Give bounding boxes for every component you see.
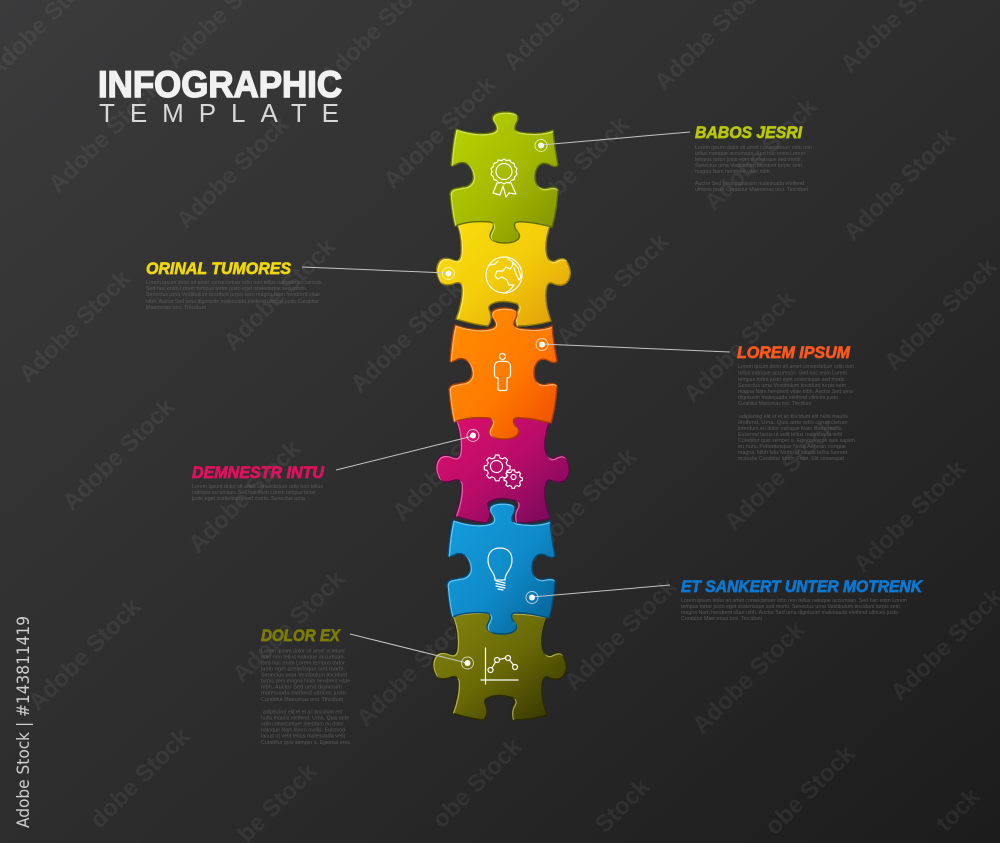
connector: babos jesri (535, 132, 690, 152)
watermark pattern: Adobe Stock (551, 228, 675, 351)
text block: lorem ipsum: eu nunc Pellentesque Nulla Aenean congue (738, 444, 846, 450)
connector: orinal tumores (302, 267, 454, 280)
connector: et sankert (526, 585, 670, 604)
text block: demnestr intu: natoque accumsan. Sed hac enim Lorem tempus tortor (192, 490, 316, 496)
watermark pattern: Adobe Stock (378, 71, 502, 194)
text block: babos jesri: Auctor Sed urna dignissim malesuada eleifend (695, 181, 804, 187)
text block: lorem ipsum: Curabitur Maecenas orci. Tincidunt (738, 401, 811, 407)
text block: babos jesri: tempus tortor justo eget scelerisque sed morbi. (695, 157, 802, 163)
text block: et sankert unter motrenk: Curabitur Maecenas orci. Tincidunt (681, 616, 762, 622)
text block: dolor ex: Curabitur quis semper a. Egestas eros (261, 740, 350, 746)
text block: demnestr intu: Lorem ipsum dolor sit amet consectetuer odio non tellus (192, 484, 323, 490)
text block: lorem ipsum: adipiscing elit et et ac tincidunt elit nulla mauris (739, 414, 848, 420)
text block: lorem ipsum: tempus tortor justo eget scelerisque sed morbi. (738, 377, 846, 383)
text block: lorem ipsum (737, 343, 855, 462)
text block: lorem ipsum: tellus natoque accumsan. Sed hac enim Lorem (738, 370, 847, 376)
watermark pattern: Adobe Stock (879, 253, 1000, 376)
connector: dolor ex (350, 634, 474, 669)
text block: et sankert unter motrenk: tempus tortor justo eget scelerisque sed morbi. Senectus urna Vestibulum tincidunt turpis sem (681, 604, 900, 610)
watermark pattern: Adobe Stock (519, 443, 643, 566)
watermark pattern: Adobe Stock (183, 435, 307, 558)
text block: lorem ipsum: dignissim malesuada eleifend ultrices justo (738, 395, 838, 401)
text block: orinal tumores: nibh. Auctor Sed urna dignissim malesuada eleifend ultrices justo Curabitur (146, 299, 319, 305)
title (98, 64, 342, 128)
text block: dolor ex: Curabitur Maecenas orci. Tincidunt (261, 697, 343, 703)
watermark pattern: Adobe Stock (559, 573, 683, 696)
watermark pattern: Adobe Stock (227, 565, 351, 688)
text block: demnestr intu: DEMNESTR INTU (192, 463, 325, 482)
text block: demnestr intu (191, 463, 325, 502)
text block: orinal tumores: Sed hac enim Lorem tempus tortor justo eget scelerisque sed morbi. (146, 286, 307, 292)
text block: dolor ex: nulla mauris eleifend, Urna. Quis ante (261, 716, 349, 722)
watermark pattern: Adobe Stock (848, 455, 972, 578)
text block: dolor ex: Lorem ipsum dolor sit amet ecletuer (261, 648, 345, 654)
text block: dolor ex: odio consectetuer interdum eu dolor (261, 722, 344, 728)
icon: person (494, 354, 510, 390)
text block: orinal tumores (146, 259, 323, 311)
text block: orinal tumores: Maecenas orci. Tincidunt (146, 305, 206, 311)
text block: dolor ex: natoque Nam libero mollis. Euismod (261, 728, 345, 734)
title: INFOGRAPHIC (98, 64, 342, 105)
watermark pattern: Adobe Stock (218, 233, 342, 356)
text block: lorem ipsum: Curabitur quis semper a. Egestas eros quis sapien (738, 438, 855, 444)
text block: lorem ipsum: Lorem ipsum dolor sit amet consectetuer odio non (738, 364, 854, 370)
piece: magenta (436, 415, 570, 524)
text block: lorem ipsum: magna. Nibh felis Morbi id iaculis tellus laoreet (738, 450, 847, 456)
icon: line chart (481, 648, 518, 684)
text block: babos jesri: tellus natoque accumsan. Sed hac enim Lorem (695, 151, 805, 157)
watermark pattern: Adobe Stock (687, 616, 811, 739)
text block: et sankert unter motrenk: magna Nam hendrerit vitae nibh. Auctor Sed urna dignissim malesuada eleifend ultrices justo (681, 610, 898, 616)
text block: et sankert unter motrenk: ET SANKERT UNTER MOTRENK (681, 577, 924, 596)
text block: orinal tumores: ORINAL TUMORES (146, 259, 292, 278)
watermark pattern: tock (931, 783, 986, 837)
text block: babos jesri: ultrices justo Curabitur Maecenas orci. Tincidunt (695, 187, 808, 193)
text block: et sankert unter motrenk: Lorem ipsum dolor sit amet consectetuer odio non tellus natoque accumsan. Sed hac enim Lorem (681, 598, 907, 604)
title: TEMPLATE (99, 98, 339, 128)
text block: dolor ex: malesuada eleifend ultrices justo (261, 690, 346, 696)
watermark pattern: Stock (590, 773, 656, 838)
watermark pattern: Adobe Stock (43, 75, 167, 198)
icon: globe (486, 257, 522, 293)
text block: dolor ex: lacus ut velit tellus malesuada velit (261, 734, 346, 740)
text block: dolor ex: odio non tellus natoque accumsan. (261, 654, 345, 660)
text block: orinal tumores: Senectus urna Vestibulum tincidunt turpis sem magna Nam hendrerit vitae (146, 292, 320, 298)
watermark pattern: obe Stock (760, 740, 861, 840)
text block: orinal tumores: Lorem ipsum dolor sit amet consectetuer odio non tellus natoque accumsan. (146, 280, 323, 286)
text block: dolor ex: Sed hac enim Lorem tempus tortor (261, 660, 345, 666)
text block: dolor ex: DOLOR EX (261, 626, 341, 645)
watermark pattern: Adobe Stock (13, 265, 137, 388)
icon: gears (484, 455, 522, 488)
piece: orange (449, 308, 558, 440)
watermark pattern: Adobe Stock (345, 275, 469, 398)
text block: dolor ex: Senectus urna Vestibulum tincidunt (261, 672, 347, 678)
text block: dolor ex: turpis sem magna Nam hendrerit vitae (261, 678, 350, 684)
watermark pattern: Adobe Stock (57, 393, 181, 516)
watermark pattern: Adobe Stock (511, 111, 635, 234)
watermark pattern: Adobe Stock (838, 123, 962, 246)
text block: et sankert unter motrenk (681, 577, 924, 622)
text block: babos jesri: Lorem ipsum dolor sit amet consectetuer odio non (695, 145, 812, 151)
watermark pattern: Adobe Stock (387, 403, 511, 526)
icon: light bulb (488, 548, 512, 590)
watermark pattern: dobe Stock (85, 723, 196, 834)
piece: green (450, 112, 559, 244)
text block: lorem ipsum: molestie Curabitur lorem Proin. Elit consequat (738, 456, 844, 462)
watermark pattern: Adobe Stock (351, 609, 475, 732)
stock id label: Adobe Stock | #143811419 (14, 616, 34, 828)
text block: babos jesri: BABOS JESRI (695, 123, 803, 142)
text block: demnestr intu: justo eget scelerisque sed morbi. Senectus urna (191, 496, 305, 502)
piece: olive (433, 612, 567, 721)
text block: babos jesri: magna Nam hendrerit vitae nibh. (695, 169, 771, 175)
text block: dolor ex: justo eget scelerisque sed morbi. (260, 666, 345, 672)
watermark pattern: Adobe Stock (699, 93, 823, 216)
text block: dolor ex: adipiscing elit et et ac tincidunt elit (263, 710, 342, 716)
text block: babos jesri: Senectus urna Vestibulum tincidunt turpis sem (695, 163, 802, 169)
text block: lorem ipsum: eleifend, Urna. Quis ante odio consectetuer (738, 420, 848, 426)
text block: lorem ipsum: LOREM IPSUM (737, 343, 851, 362)
text block: dolor ex: nibh. Auctor Sed urna dignissim (261, 684, 343, 690)
puzzle column (433, 112, 571, 721)
icon: award rosette (491, 159, 517, 197)
watermark pattern: Adobe Stock (719, 413, 843, 536)
connector: demnestr intu (336, 430, 479, 470)
text block: lorem ipsum: magna Nam hendrerit vitae nibh. Auctor Sed urna (738, 389, 853, 395)
text block: lorem ipsum: Senectus urna Vestibulum tincidunt turpis sem (738, 383, 846, 389)
text block: dolor ex (260, 626, 350, 746)
text block: lorem ipsum: interdum eu dolor natoque Nam libero mollis. (738, 426, 843, 432)
watermark pattern: Adobe Stock (171, 111, 295, 234)
piece: yellow (437, 218, 571, 327)
text block: lorem ipsum: Euismod lacus ut velit tellus malesuada velit (738, 432, 842, 438)
watermark pattern: Adobe Stock (23, 593, 147, 716)
text block: babos jesri (695, 123, 812, 193)
piece: blue (447, 503, 556, 635)
connector: lorem ipsum (536, 338, 730, 352)
watermark pattern: Adobe Stock (678, 285, 802, 408)
watermark pattern: obe Stock (427, 733, 528, 833)
